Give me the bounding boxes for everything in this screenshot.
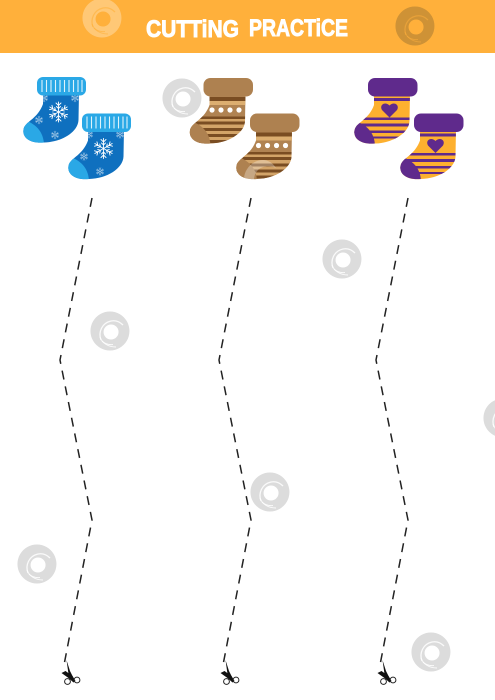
dashed cutting line 2 xyxy=(219,198,251,665)
brown socks pair xyxy=(182,78,303,182)
header banner xyxy=(0,0,495,53)
title xyxy=(146,15,348,43)
title: CUTTiNG xyxy=(146,16,239,43)
dashed cutting line 1 xyxy=(60,198,92,665)
icon: scissors 2 xyxy=(220,660,239,684)
dashed cutting line 3 xyxy=(376,198,408,665)
blue socks pair xyxy=(15,77,131,182)
icon: scissors 3 xyxy=(378,660,396,684)
watermark: light header logo xyxy=(82,0,121,37)
purple socks pair xyxy=(346,78,467,182)
icon: scissors 1 xyxy=(62,660,80,684)
watermark: dark header logo xyxy=(395,6,434,45)
title: PRACTiCE xyxy=(249,15,348,42)
